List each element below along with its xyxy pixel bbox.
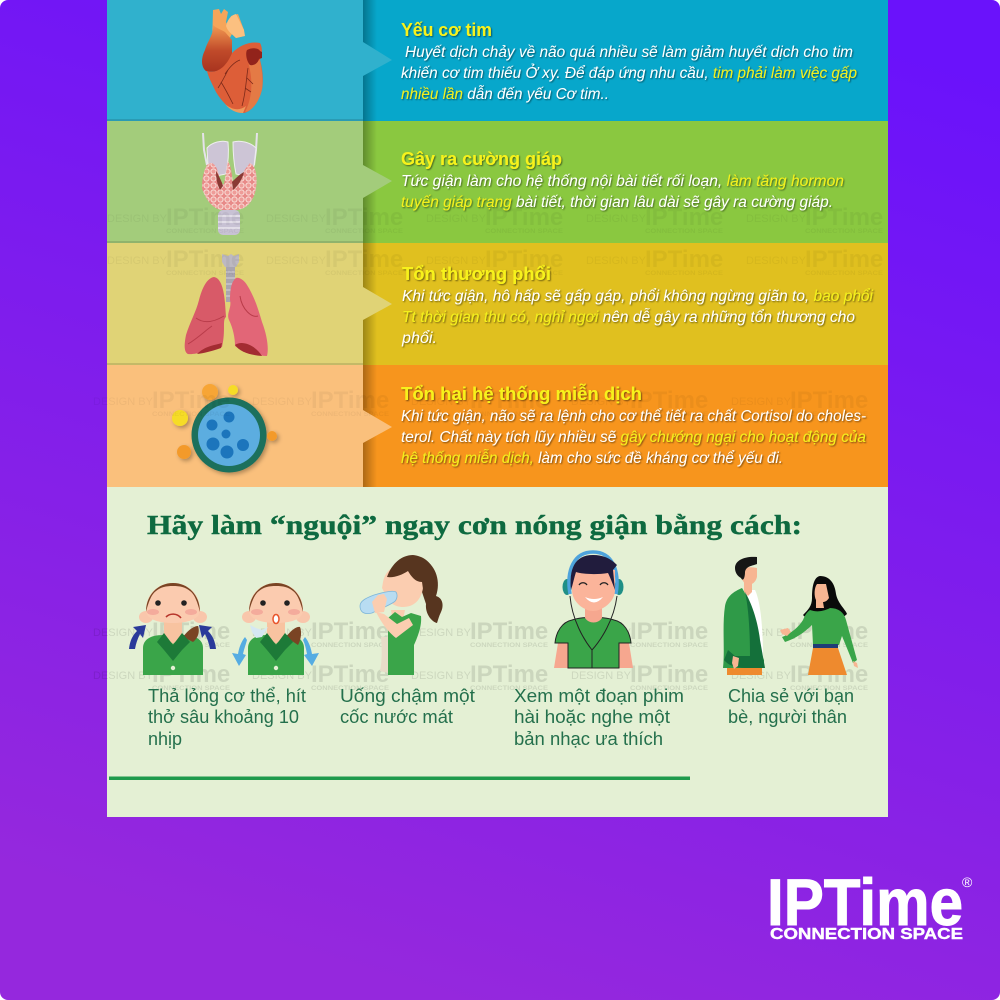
- panel: immune system damage: [107, 365, 888, 487]
- text: relax and breathe: thở sâu khoảng 10: [148, 707, 299, 727]
- logo: IPTime: CONNECTION SPACE: [770, 926, 963, 943]
- icon: heart: [202, 9, 263, 113]
- text: hyperthyroidism: Gây ra cường giáp: [401, 149, 562, 169]
- text: share with friends: [728, 686, 854, 727]
- text: lung damage: Tt thời gian thu có, nghỉ ngơi nên dễ gây ra những tổn thương cho: [402, 309, 855, 326]
- heading: Hãy làm “nguội” ngay cơn nóng giận bằng cách:: [147, 510, 802, 540]
- icon: immune cell: [172, 384, 277, 472]
- text: watch film or listen to music: bản nhạc ưa thích: [514, 729, 663, 749]
- arrows: exhale: [232, 637, 319, 666]
- text: immune system damage: Khi tức giận, não sẽ ra lệnh cho cơ thể tiết ra chất Cortisol do choles-: [401, 408, 866, 425]
- text: hyperthyroidism: [401, 149, 844, 211]
- text: immune system damage: [401, 383, 866, 467]
- text: lung damage: Khi tức giận, hô hấp sẽ gấp gáp, phổi không ngừng giãn to, bao phổi: [402, 288, 874, 305]
- text: watch film or listen to music: hài hoặc nghe một: [514, 707, 670, 727]
- text: watch film or listen to music: [514, 686, 684, 749]
- icon: lungs: [185, 254, 268, 356]
- watermarks: tips panel: [93, 618, 869, 692]
- text: drink water: [340, 686, 475, 727]
- arrows: inhale: [129, 625, 216, 649]
- text: share with friends: bè, người thân: [728, 707, 847, 727]
- panel: weak heart muscle: [107, 0, 888, 121]
- text: hyperthyroidism: Tức giận làm cho hệ thống nội bài tiết rối loạn, làm tăng hormon: [401, 173, 844, 190]
- text: drink water: cốc nước mát: [340, 707, 453, 727]
- text: relax and breathe: [148, 686, 306, 749]
- icon: listening to music: [554, 552, 633, 668]
- text: relax and breathe: Thả lỏng cơ thể, hít: [148, 686, 306, 706]
- text: share with friends: Chia sẻ với bạn: [728, 686, 854, 706]
- text: weak heart muscle: khiến cơ tim thiếu Ở xy. Để đáp ứng nhu cầu, tim phải làm việc gấp: [401, 64, 857, 82]
- text: lung damage: [401, 264, 874, 347]
- logo: IPTime: ®: [962, 874, 973, 890]
- panel: hyperthyroidism: [107, 121, 888, 243]
- text: relax and breathe: nhịp: [148, 729, 182, 749]
- icon: breathing in: [129, 583, 216, 675]
- logo: IPTime: IPTime: [767, 865, 963, 939]
- text: hyperthyroidism: tuyến giáp trạng bài tiết, thời gian lâu dài sẽ gây ra cường giáp.: [401, 194, 833, 211]
- text: weak heart muscle: Yếu cơ tim: [401, 20, 492, 40]
- panel: cooling down tips: [93, 487, 888, 817]
- text: weak heart muscle: [401, 20, 857, 103]
- text: immune system damage: hệ thống miễn dịch, làm cho sức đề kháng cơ thể yếu đi.: [401, 450, 783, 467]
- text: lung damage: phổi.: [401, 330, 437, 347]
- text: weak heart muscle: nhiều lần dẫn đến yếu Cơ tim..: [401, 86, 609, 103]
- watermarks: coloured rows: [93, 204, 884, 418]
- panel: effects of anger: [93, 0, 888, 487]
- panel: lung damage: [107, 243, 888, 365]
- icon: thyroid: [202, 133, 257, 235]
- text: drink water: Uống chậm một: [340, 686, 475, 706]
- text: immune system damage: Tổn hại hệ thống miễn dịch: [401, 383, 642, 404]
- icon: sharing with friends: [723, 557, 858, 675]
- text: lung damage: Tổn thương phổi: [402, 264, 551, 284]
- divider line: [109, 776, 690, 780]
- icon: drinking water: [360, 555, 443, 675]
- text: weak heart muscle: Huyết dịch chảy về não quá nhiều sẽ làm giảm huyết dịch cho tim: [405, 44, 853, 61]
- text: immune system damage: terol. Chất này tích lũy nhiều sẽ gây chướng ngại cho hoạt động của: [401, 429, 866, 446]
- icon: breathing out: [232, 583, 319, 675]
- text: watch film or listen to music: Xem một đoạn phim: [514, 686, 684, 706]
